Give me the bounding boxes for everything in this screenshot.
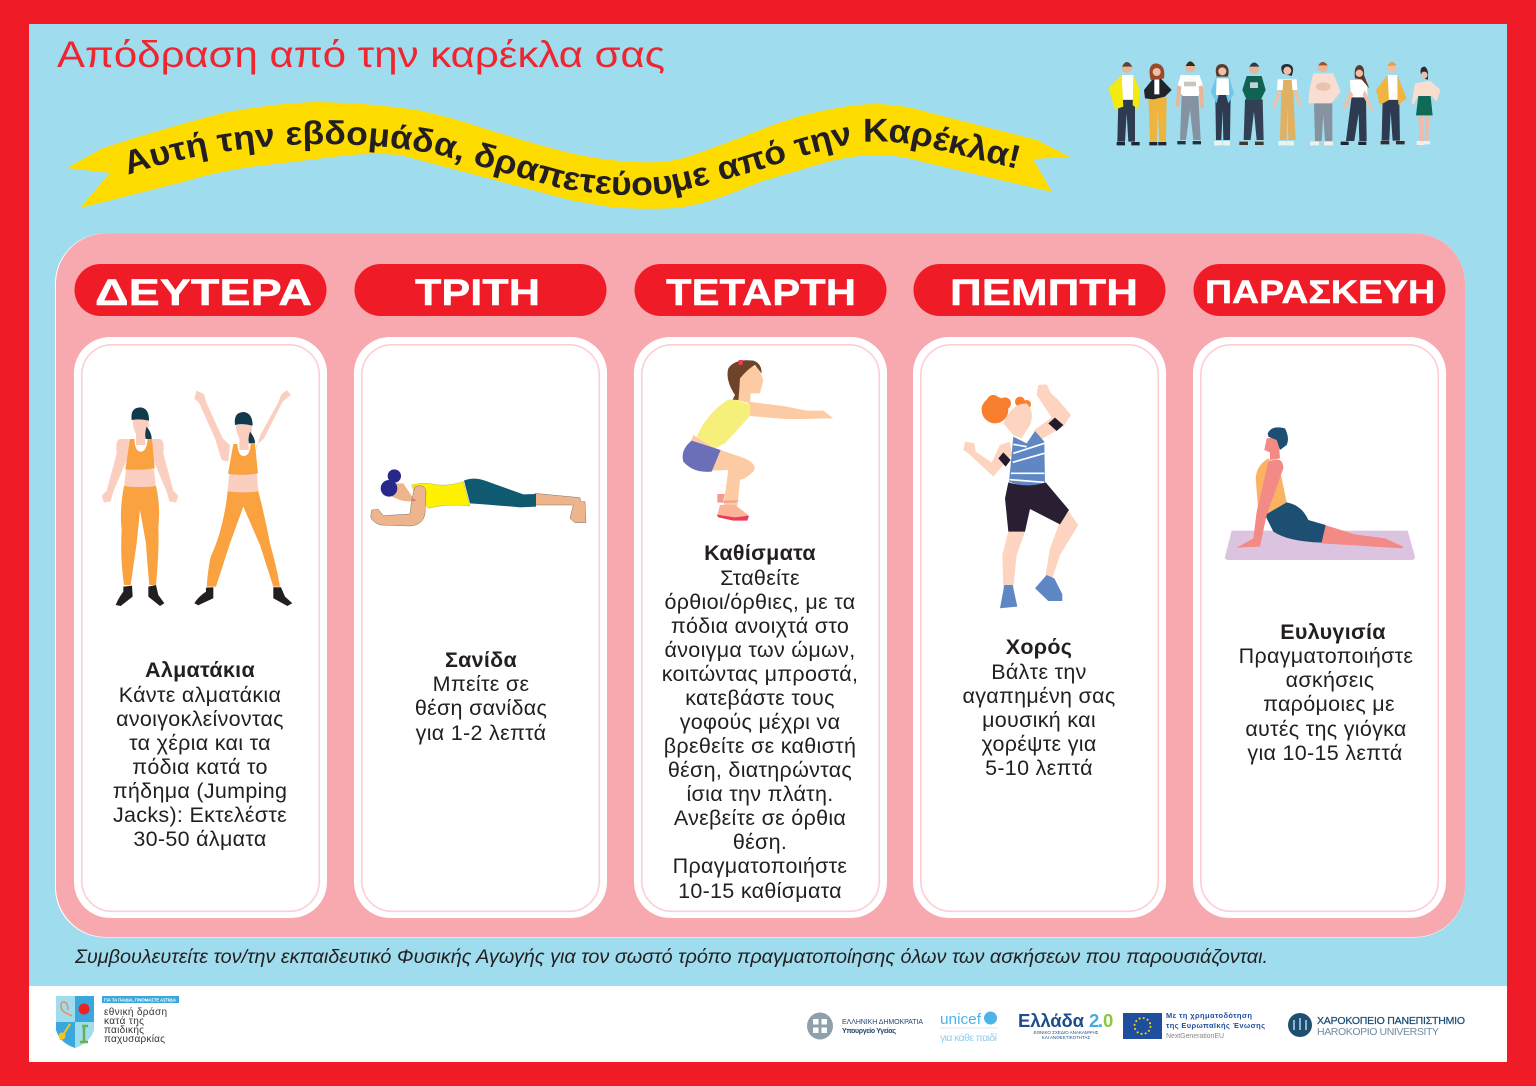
logo: Harokopio University <box>1288 1013 1465 1038</box>
card: Thursday <box>913 337 1166 918</box>
logo: UNICEF: για κάθε παιδί <box>940 1032 998 1044</box>
icon: plank <box>371 469 586 526</box>
exercise text: flexibility: παρόμοιες με <box>1263 692 1395 716</box>
exercise text: squats: βρεθείτε σε καθιστή <box>664 734 856 758</box>
exercise text: jumping jacks: Αλματάκια <box>145 658 255 682</box>
exercise text: jumping jacks: τα χέρια και τα <box>129 731 271 755</box>
exercise text: dance <box>962 635 1116 780</box>
logo: national action against childhood obesity: παιδικής <box>104 1024 144 1036</box>
logo: UNICEF <box>940 1012 998 1044</box>
exercise text: dance: 5-10 λεπτά <box>985 756 1093 780</box>
day label: Wednesday: ΤΕΤΑΡΤΗ <box>666 272 856 313</box>
icon: squat <box>683 360 833 521</box>
exercise text: jumping jacks: 30-50 άλματα <box>133 827 267 851</box>
day label: Friday: ΠΑΡΑΣΚΕΥΗ <box>1205 274 1435 310</box>
exercise text: dance: αγαπημένη σας <box>962 684 1116 708</box>
exercise text: plank <box>415 648 547 745</box>
exercise text: squats: πόδια ανοιχτά στο <box>671 614 849 638</box>
logo: Hellenic Ministry of Health: ΕΛΛΗΝΙΚΗ ΔΗΜΟΚΡΑΤΙΑ <box>842 1019 923 1026</box>
exercise text: dance: Χορός <box>1006 635 1072 659</box>
exercise text: squats: κοιτώντας μπροστά, <box>662 662 858 686</box>
exercise text: dance: Βάλτε την <box>991 660 1087 684</box>
day label: Wednesday <box>634 264 886 316</box>
illustration: group of ten students <box>1108 61 1441 145</box>
footnote: Συμβουλευτείτε τον/την εκπαιδευτικό Φυσικής Αγωγής για τον σωστό τρόπο πραγματοποίησης όλων των ασκήσεων που παρουσιάζονται. <box>74 947 1268 968</box>
day label: Thursday: ΠΕΜΠΤΗ <box>950 272 1138 313</box>
panel: Wednesday <box>634 264 887 918</box>
icon: jumping jacks <box>102 390 292 606</box>
logo: Greece 2.0: ΚΑΙ ΑΝΘΕΚΤΙΚΟΤΗΤΑΣ <box>1042 1035 1090 1040</box>
day label: Tuesday: ΤΡΙΤΗ <box>415 272 540 313</box>
exercise text: plank: θέση σανίδας <box>415 696 547 720</box>
day label: Tuesday <box>354 264 606 316</box>
exercise text: jumping jacks: Jacks): Εκτελέστε <box>113 803 287 827</box>
person 8 <box>1341 65 1373 145</box>
exercise text: squats: Σταθείτε <box>720 566 800 590</box>
card: Friday <box>1193 337 1446 918</box>
logo: European Union funding <box>1123 1011 1265 1040</box>
logo: Greece 2.0 <box>1018 1010 1113 1040</box>
title: Απόδραση από την καρέκλα σας <box>57 34 665 75</box>
logo: national action against childhood obesity: κατά της <box>104 1015 144 1027</box>
day label: Thursday <box>914 264 1166 316</box>
exercise text: jumping jacks: Κάντε αλματάκια <box>119 683 281 707</box>
exercise text: squats: Καθίσματα <box>704 541 816 565</box>
icon: dancer <box>963 384 1078 608</box>
exercise text: dance: χορέψτε για <box>981 732 1097 756</box>
exercise text: jumping jacks: πόδια κατά το <box>132 755 268 779</box>
person 10 <box>1412 67 1441 145</box>
logo: European Union funding: της Ευρωπαϊκής Ένωσης <box>1166 1021 1265 1030</box>
day label: Friday <box>1194 264 1446 316</box>
logo: UNICEF: unicef <box>940 1012 982 1028</box>
exercise text: flexibility: αυτές της γιόγκα <box>1245 717 1407 741</box>
exercise text: squats: κατεβάστε τους <box>685 686 835 710</box>
exercise text: dance: μουσική και <box>982 708 1096 732</box>
exercise text: squats: γοφούς μέχρι να <box>680 710 840 734</box>
panel: Monday <box>74 264 327 918</box>
person 3 <box>1176 61 1204 144</box>
exercise text: flexibility <box>1239 620 1413 765</box>
exercise text: squats: άνοιγμα των ώμων, <box>665 638 855 662</box>
exercise text: squats: θέση. <box>733 830 787 854</box>
day label: Monday: ΔΕΥΤΕΡΑ <box>95 272 312 313</box>
exercise text: flexibility: Πραγματοποιήστε <box>1239 644 1413 668</box>
logo: Harokopio University: ΧΑΡΟΚΟΠΕΙΟ ΠΑΝΕΠΙΣΤΗΜΙΟ <box>1317 1015 1465 1027</box>
exercise text: squats: ίσια την πλάτη. <box>686 782 834 806</box>
logo: European Union funding: NextGenerationEU <box>1166 1033 1224 1040</box>
exercise text: squats: Πραγματοποιήστε <box>673 854 847 878</box>
logo: national action against childhood obesity <box>56 996 179 1048</box>
logo: Hellenic Ministry of Health <box>807 1012 923 1040</box>
day label: Monday <box>74 264 326 316</box>
icon: yoga stretch <box>1225 427 1415 560</box>
logo: Greece 2.0: ΕΘΝΙΚΟ ΣΧΕΔΙΟ ΑΝΑΚΑΜΨΗΣ <box>1034 1030 1099 1035</box>
exercise text: squats: Ανεβείτε σε όρθια <box>674 806 846 830</box>
logo: national action against childhood obesity: εθνική δράση <box>104 1006 167 1018</box>
logo: national action against childhood obesity: ΓΙΑ ΤΑ ΠΑΙΔΙΑ, ΓΙΝΟΜΑΣΤΕ ΑΣΠΙΔΑ <box>104 998 177 1002</box>
exercise text: squats: όρθιοι/όρθιες, με τα <box>664 590 856 614</box>
panel: Friday <box>1193 264 1446 918</box>
card: Monday <box>74 337 327 918</box>
banner ribbon: Αυτή την εβδομάδα, δραπετεύουμε από την Καρέκλα! <box>128 118 1020 198</box>
person 4 <box>1211 64 1234 145</box>
logo: Greece 2.0: 0 <box>1103 1010 1113 1031</box>
exercise text: jumping jacks <box>113 658 287 851</box>
logo: Hellenic Ministry of Health: Υπουργείο Υγείας <box>842 1028 896 1035</box>
logo: Harokopio University: HAROKOPIO UNIVERSITY <box>1317 1026 1439 1038</box>
exercise text: plank: Μπείτε σε <box>433 672 529 696</box>
exercise text: flexibility: Ευλυγισία <box>1280 620 1386 644</box>
logo: Greece 2.0: Ελλάδα <box>1018 1010 1085 1031</box>
exercise text: plank: Σανίδα <box>445 648 517 672</box>
person 1 <box>1108 62 1140 145</box>
person 9 <box>1376 62 1407 144</box>
person 5 <box>1239 62 1266 145</box>
panel: weekly exercise plan <box>55 234 1465 938</box>
exercise text: jumping jacks: ανοιγοκλείνοντας <box>116 707 284 731</box>
exercise text: flexibility: ασκήσεις <box>1286 668 1374 692</box>
person 7 <box>1308 62 1341 145</box>
exercise text: squats <box>662 541 858 903</box>
card: Tuesday <box>354 337 607 918</box>
panel: Thursday <box>913 264 1166 918</box>
card: Wednesday <box>634 337 887 918</box>
person 2 <box>1144 63 1172 145</box>
logo: European Union funding: Με τη χρηματοδότηση <box>1166 1011 1252 1020</box>
exercise text: squats: θέση, διατηρώντας <box>668 758 852 782</box>
exercise text: squats: 10-15 καθίσματα <box>678 879 842 903</box>
exercise text: plank: για 1-2 λεπτά <box>416 721 546 745</box>
person 6 <box>1273 64 1302 145</box>
exercise text: flexibility: για 10-15 λεπτά <box>1247 741 1403 765</box>
logo: Greece 2.0: 2. <box>1089 1010 1103 1031</box>
panel: Tuesday <box>354 264 607 918</box>
exercise text: jumping jacks: πήδημα (Jumping <box>113 779 287 803</box>
logo: national action against childhood obesity: παχυσαρκίας <box>104 1033 165 1045</box>
